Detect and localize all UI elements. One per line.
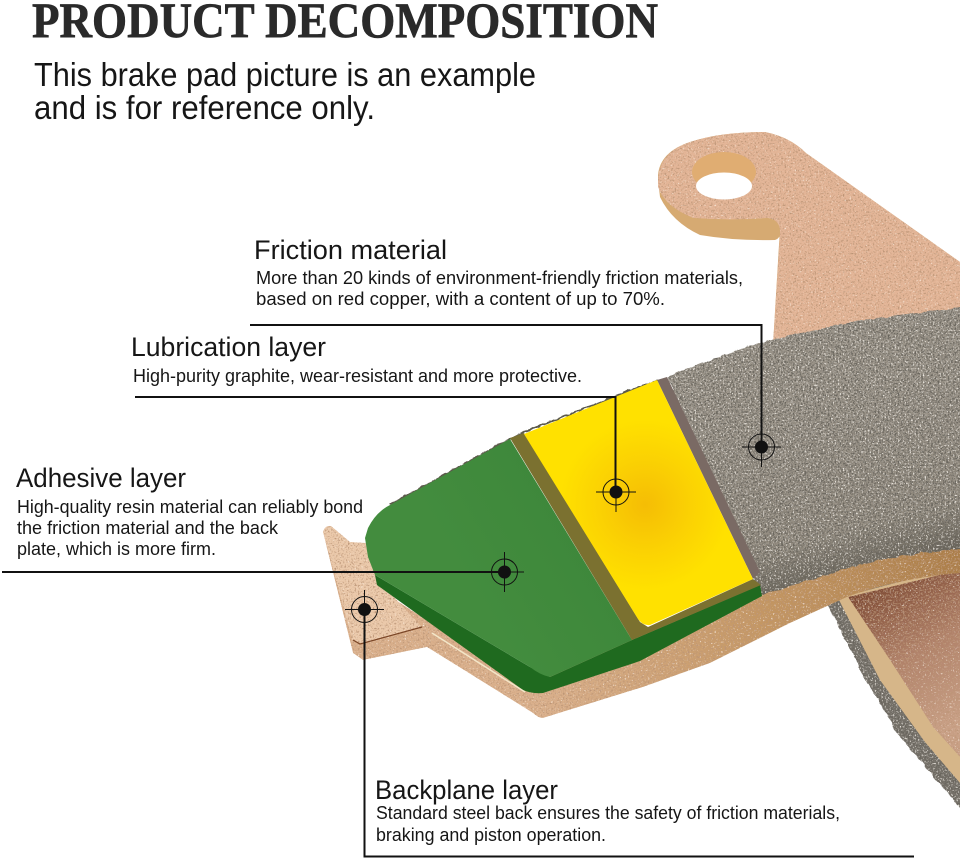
target marker: friction material: [742, 428, 781, 467]
brake pad illustration: [323, 132, 960, 825]
friction material block: [667, 305, 960, 595]
backplate tab top face: [323, 526, 422, 644]
friction material callout: Friction material: [254, 235, 447, 265]
target marker: backplane layer: [345, 590, 384, 629]
rough dark top edge of the pad: [390, 380, 657, 505]
friction material callout: More than 20 kinds of environment-friendly friction materials,: [256, 268, 743, 288]
lubrication layer callout: High-purity graphite, wear-resistant and more protective.: [133, 366, 582, 386]
lower second brake pad: [827, 560, 960, 825]
lubrication layer callout: Lubrication layer: [131, 332, 326, 362]
adhesive layer callout: the friction material and the back: [17, 518, 279, 538]
brown layer edge: [657, 377, 760, 579]
adhesive layer callout: [2, 463, 505, 572]
subtitle: and is for reference only.: [34, 89, 375, 126]
lubrication layer olive edge: [510, 433, 761, 640]
dark scorch line on tab: [353, 627, 422, 644]
friction backing plate edge: [323, 526, 960, 718]
friction material callout: [250, 235, 762, 447]
target marker: adhesive layer: [485, 552, 524, 592]
lubrication layer yellow face: [524, 380, 753, 625]
friction material callout: based on red copper, with a content of up to 70%.: [256, 289, 665, 309]
adhesive layer callout: plate, which is more firm.: [17, 539, 216, 559]
target marker: lubrication layer: [596, 472, 636, 512]
subtitle: [34, 56, 536, 126]
upper backplate with mounting hole: [658, 132, 960, 345]
adhesive layer callout: High-quality resin material can reliably bond: [17, 497, 363, 517]
adhesive layer side: [375, 575, 762, 693]
adhesive layer callout: Adhesive layer: [16, 463, 186, 493]
backplane layer callout: [364, 610, 914, 856]
backplane layer callout: Standard steel back ensures the safety of friction materials,: [376, 803, 840, 823]
backplane layer callout: braking and piston operation.: [376, 825, 606, 845]
pale highlight along the backplate edge: [432, 633, 525, 692]
adhesive layer green top: [365, 439, 632, 677]
lubrication layer callout: [131, 332, 616, 491]
subtitle: This brake pad picture is an example: [34, 56, 536, 93]
backplane layer callout: Backplane layer: [375, 775, 558, 805]
